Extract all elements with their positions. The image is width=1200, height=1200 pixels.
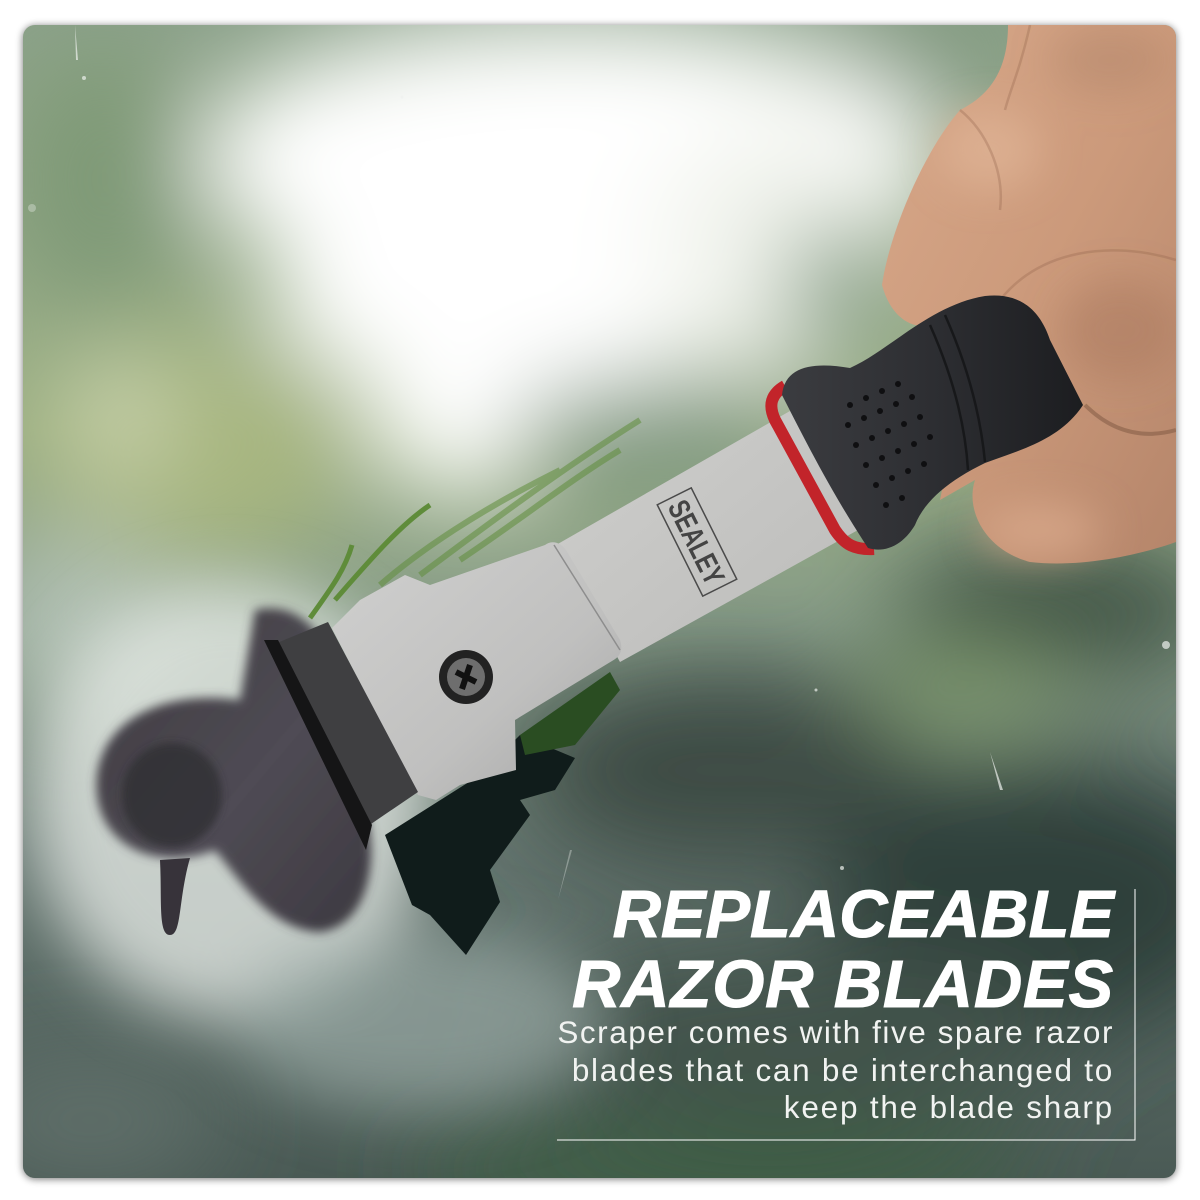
dots on grip bbox=[845, 381, 933, 508]
red ring bbox=[771, 386, 874, 549]
grip ribs bbox=[930, 315, 985, 470]
text frame bbox=[557, 889, 1135, 1140]
burn smudge bbox=[96, 608, 371, 935]
body text: blades that can be interchanged to bbox=[572, 1052, 1114, 1088]
body text: Scraper comes with five spare razor bbox=[557, 1014, 1114, 1050]
logo: SEALEY bbox=[657, 488, 737, 596]
white mist around burn mark bbox=[30, 580, 610, 1110]
heading bbox=[572, 877, 1116, 1022]
scraped dark glass bbox=[385, 735, 575, 955]
blade holder dark bbox=[272, 622, 418, 826]
heading: REPLACEABLE bbox=[613, 877, 1114, 952]
scraper head bbox=[332, 542, 621, 800]
specks and scratches on glass bbox=[28, 25, 1170, 900]
logo: SEALEY: SEALEY bbox=[661, 495, 731, 590]
green streak residue bbox=[310, 420, 640, 618]
body text bbox=[557, 1014, 1114, 1125]
hand bbox=[882, 25, 1180, 564]
scraper shaft bbox=[556, 411, 858, 662]
heading: RAZOR BLADES bbox=[572, 947, 1114, 1022]
rubber grip bbox=[782, 295, 1083, 550]
screw bbox=[439, 650, 493, 704]
body text: keep the blade sharp bbox=[784, 1089, 1114, 1125]
